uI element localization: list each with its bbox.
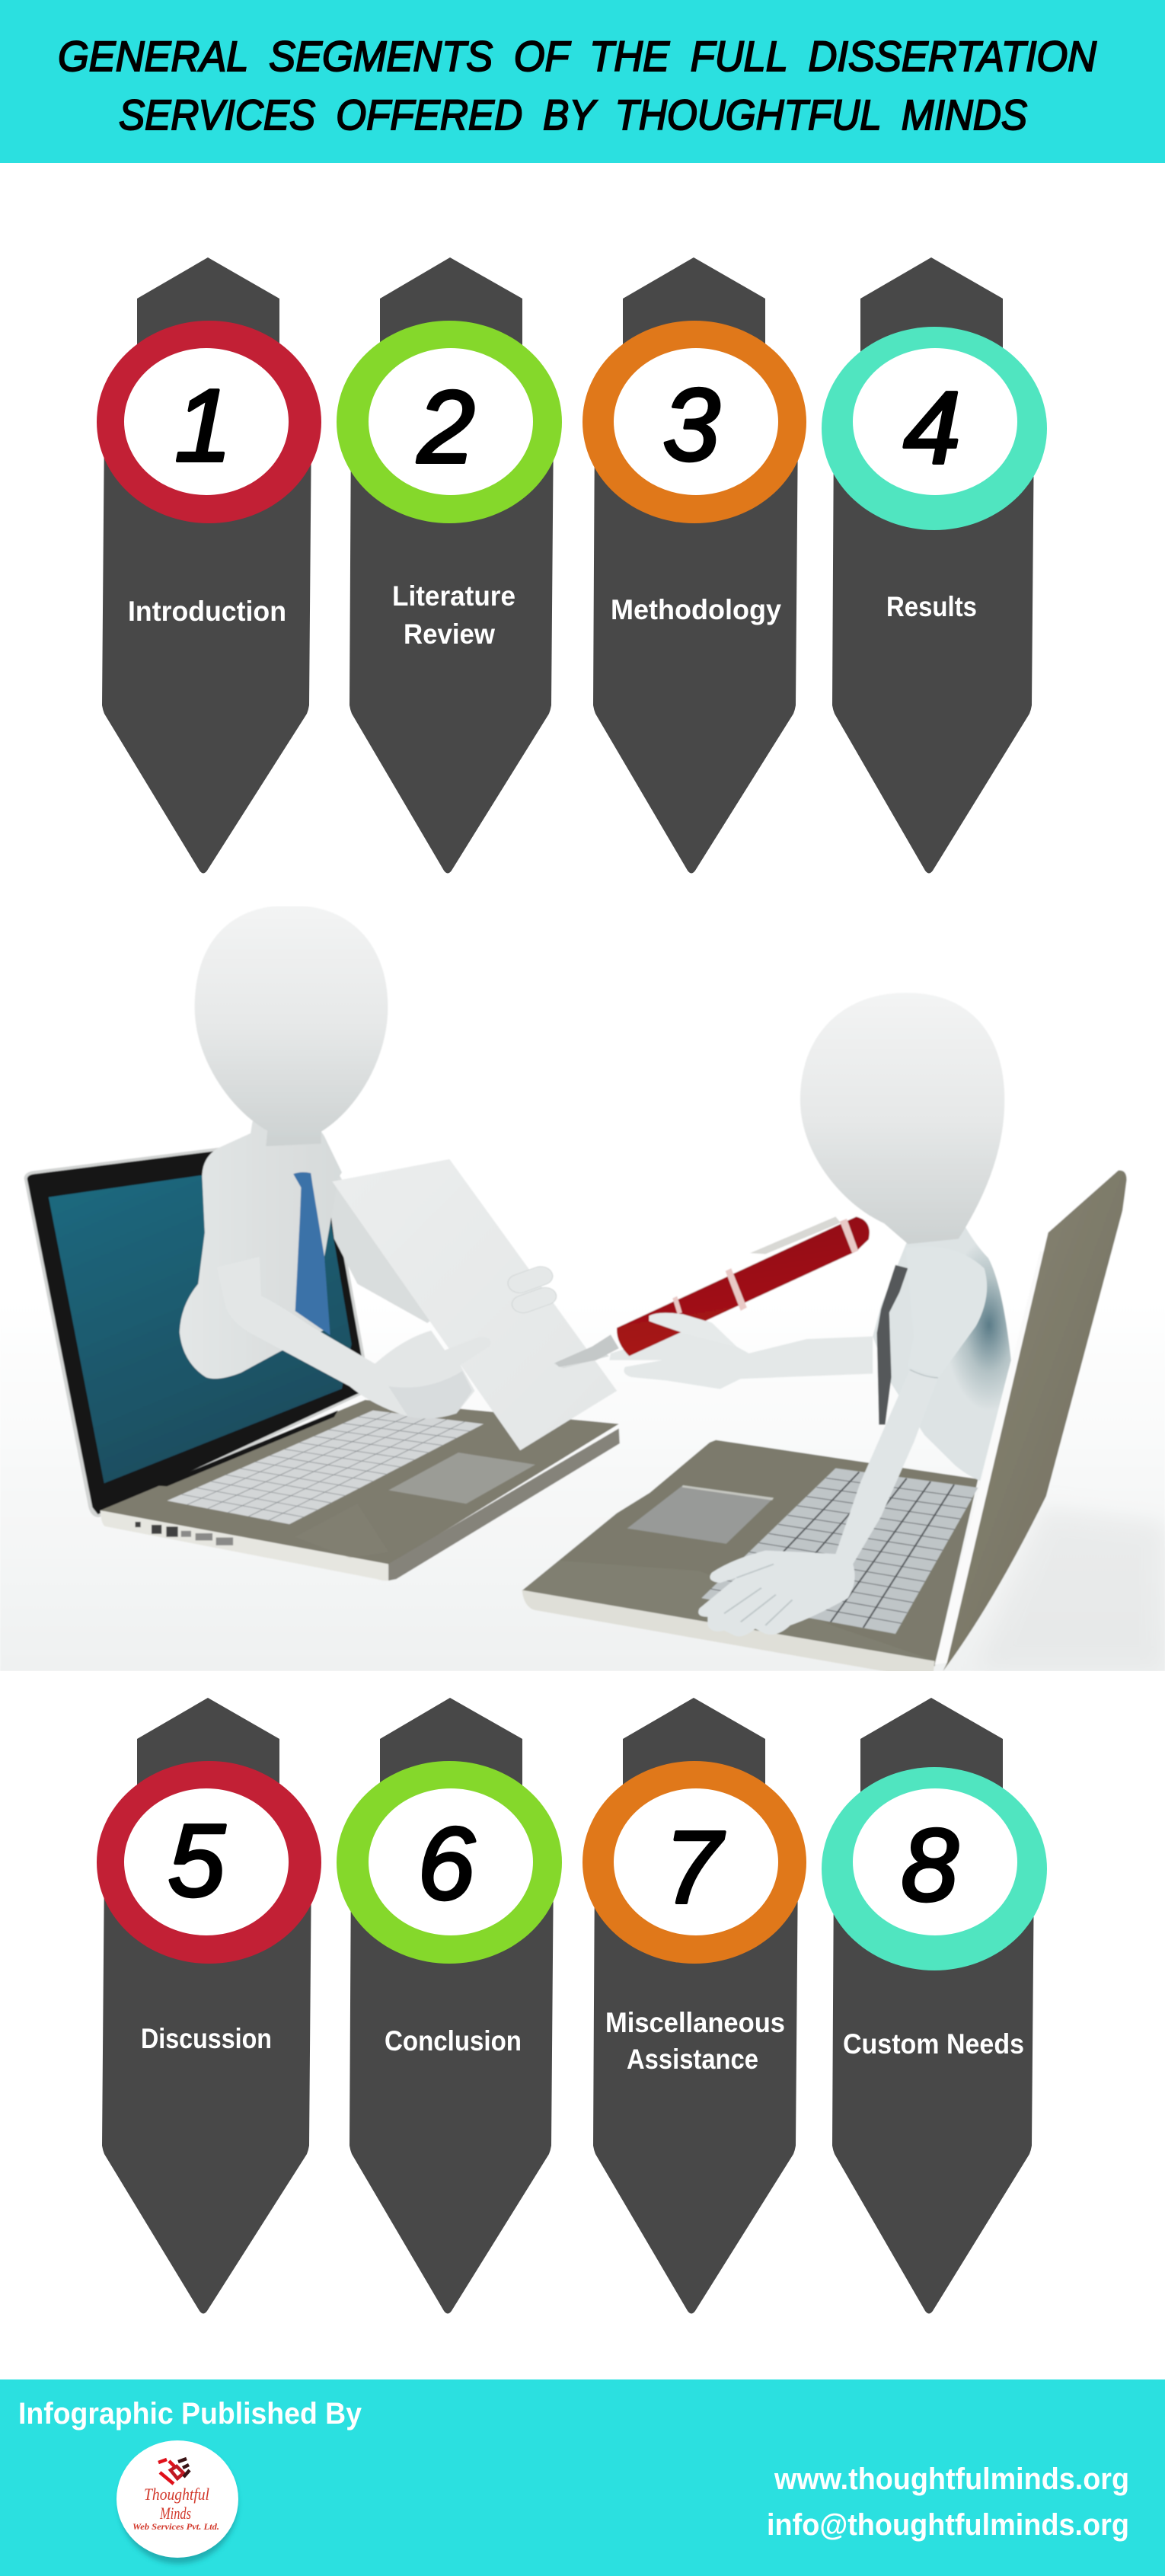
label Literature Review: Review [404,618,495,650]
title [58,32,1097,139]
document [332,1159,617,1450]
pin 4: Results [822,257,1047,873]
left laptop [24,1136,620,1580]
number 1: 1 [174,368,232,483]
right figure [555,1213,1011,1636]
pin 6: Conclusion [337,1698,562,2314]
label Miscellaneous Assistance: Assistance [627,2044,758,2075]
footer band [0,2379,1165,2576]
pin 7: Miscellaneous Assistance [582,1698,806,2314]
pin 1: Introduction [97,257,321,873]
ring 7 [582,1761,806,1964]
number 3: 3 [662,367,720,482]
ring 5 [97,1761,321,1964]
title: GENERAL SEGMENTS OF THE FULL DISSERTATION [58,32,1097,80]
floor shadow [1008,1516,1159,1650]
published by heading: Infographic Published By [18,2397,362,2431]
illustration: two figures exchanging a document through laptops [0,905,1165,1680]
label Literature Review [392,580,515,650]
website: www.thoughtfulminds.org [774,2463,1129,2496]
number 4: 4 [903,370,961,485]
head of right figure [800,992,1004,1244]
logo wordmark [132,2485,219,2532]
pin 2: Literature Review [337,257,562,873]
right laptop [522,1171,1127,1680]
number 7: 7 [664,1810,725,1925]
label Results: Results [886,591,977,622]
label Discussion: Discussion [141,2023,272,2054]
logo wordmark: Thoughtful [144,2485,209,2504]
pin 5: Discussion [97,1698,321,2314]
number 8: 8 [901,1807,959,1922]
email: info@thoughtfulminds.org [767,2508,1129,2542]
title: SERVICES OFFERED BY THOUGHTFUL MINDS [119,91,1027,139]
label Miscellaneous Assistance [605,2007,785,2075]
label Conclusion: Conclusion [385,2025,522,2057]
pin 3: Methodology [582,257,806,873]
ring 3 [582,321,806,523]
ring 4 [822,327,1047,530]
header banner [0,0,1165,163]
logo wordmark: Web Services Pvt. Ltd. [132,2521,219,2532]
left figure body [180,1121,435,1379]
number 5: 5 [168,1803,225,1918]
ring 6 [337,1761,562,1964]
label Miscellaneous Assistance: Miscellaneous [605,2007,785,2038]
logo badge [116,2440,238,2564]
pin 8: Custom Needs [822,1698,1047,2314]
head of left figure [195,905,388,1146]
number 2: 2 [417,369,475,484]
ring 1 [97,321,321,523]
logo wordmark: Minds [159,2504,191,2523]
left figure arm and pointing hand [282,1313,475,1419]
ring 8 [822,1767,1047,1970]
label Methodology: Methodology [611,594,781,625]
label Custom Needs: Custom Needs [843,2028,1024,2060]
label Literature Review: Literature [392,580,515,612]
logo icon [158,2459,190,2484]
number 6: 6 [417,1806,475,1921]
label Introduction: Introduction [128,596,286,627]
ring 2 [337,321,562,523]
